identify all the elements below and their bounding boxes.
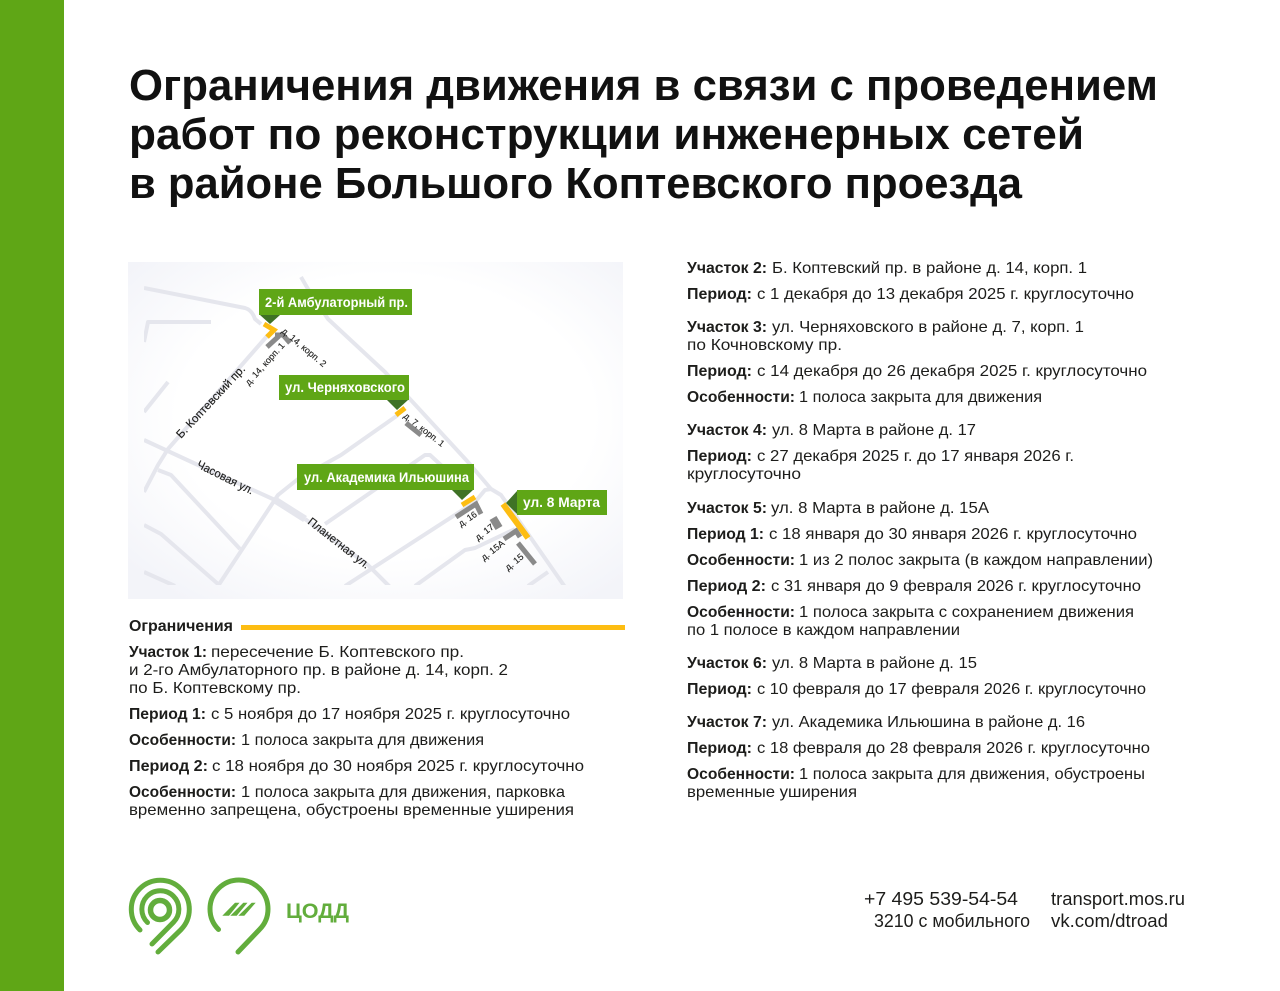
contacts: web: vk.com/dtroad <box>1051 911 1168 931</box>
text block: section 1: временно запрещена, обустроены временные уширения <box>129 802 574 819</box>
text block: section 3 <box>687 319 1147 406</box>
text block: section 7: ул. Академика Ильюшина в районе д. 16 <box>772 714 1085 731</box>
icon: transport logo pin <box>131 880 189 952</box>
map labels: Планетная ул. <box>305 516 372 572</box>
callout: 2-й Амбулаторный пр.: 2-й Амбулаторный пр. <box>265 294 408 310</box>
green sidebar <box>0 0 64 991</box>
text block: section 5: Период 2: <box>687 578 766 595</box>
text block: section 5: Участок 5: <box>687 500 767 517</box>
callout: ул. 8 Марта: ул. 8 Марта <box>523 494 600 510</box>
map labels: д. 7, корп. 1 <box>402 411 447 449</box>
text block: section 1: 1 полоса закрыта для движения, парковка <box>241 784 565 801</box>
text block: section 2 <box>687 260 1134 303</box>
text block: section 1: пересечение Б. Коптевского пр. <box>211 644 464 661</box>
text block: section 1: Участок 1: <box>129 644 207 661</box>
text block: section 3: с 14 декабря до 26 декабря 2025 г. круглосуточно <box>757 363 1147 380</box>
icon: CODD logo pin <box>210 880 268 952</box>
text block: section 3: Особенности: <box>687 389 795 406</box>
text block: section 5: по 1 полосе в каждом направлении <box>687 622 960 639</box>
text block: section 5: Особенности: <box>687 604 795 621</box>
text block: section 6: с 10 февраля до 17 февраля 2026 г. круглосуточно <box>757 681 1146 698</box>
contacts: web <box>1051 889 1185 931</box>
map labels: д. 16 <box>457 509 479 529</box>
text block: section 5: с 31 января до 9 февраля 2026 г. круглосуточно <box>771 578 1141 595</box>
text block: section 1: с 18 ноября до 30 ноября 2025 г. круглосуточно <box>212 758 584 775</box>
text block: section 7: временные уширения <box>687 784 857 801</box>
text block: section 5: Особенности: <box>687 552 795 569</box>
text block: section 2: Период: <box>687 286 752 303</box>
text block: section 4: ул. 8 Марта в районе д. 17 <box>772 422 976 439</box>
text block: section 1: Особенности: <box>129 732 236 749</box>
text block: section 1: по Б. Коптевскому пр. <box>129 680 301 697</box>
text block: section 1: Период 2: <box>129 758 208 775</box>
map labels <box>174 326 526 573</box>
text block: section 5: Период 1: <box>687 526 764 543</box>
map labels: д. 14, корп. 2 <box>280 326 328 369</box>
restrictions heading <box>129 618 625 635</box>
text block: section 3: 1 полоса закрыта для движения <box>799 389 1042 406</box>
text block: section 6: Участок 6: <box>687 655 767 672</box>
map panel <box>128 262 623 599</box>
text block: section 5: ул. 8 Марта в районе д. 15А <box>771 500 989 517</box>
title: работ по реконструкции инженерных сетей <box>129 110 1084 159</box>
text block: section 7: Участок 7: <box>687 714 767 731</box>
text block: section 1: Период 1: <box>129 706 206 723</box>
map labels: д. 15А <box>479 538 507 563</box>
title: Ограничения движения в связи с проведением <box>129 61 1158 110</box>
map labels: д. 15 <box>503 552 526 573</box>
map labels: д. 14, корп. 1 <box>243 341 287 387</box>
text block: section 2: Участок 2: <box>687 260 767 277</box>
text block: section 6: Период: <box>687 681 752 698</box>
text block: section 3: Период: <box>687 363 752 380</box>
text block: section 4: Участок 4: <box>687 422 767 439</box>
text block: section 7 <box>687 714 1150 801</box>
map labels: д. 17 <box>473 522 496 543</box>
contacts: phones: 3210 с мобильного <box>874 911 1030 931</box>
callout: ул. 8 Марта <box>506 490 607 515</box>
text block: section 4: Период: <box>687 448 752 465</box>
callout: ул. Черняховского <box>279 375 409 410</box>
callout: ул. Академика Ильюшина <box>297 464 474 500</box>
text block: section 7: Период: <box>687 740 752 757</box>
text block: section 1: 1 полоса закрыта для движения <box>241 732 484 749</box>
title: в районе Большого Коптевского проезда <box>129 159 1023 208</box>
callout: ул. Черняховского: ул. Черняховского <box>285 379 405 395</box>
text block: section 5: 1 из 2 полос закрыта (в каждом направлении) <box>799 552 1153 569</box>
logo text: ЦОДД <box>286 900 349 923</box>
text block: section 7: Особенности: <box>687 766 795 783</box>
text block: section 6 <box>687 655 1146 698</box>
buildings <box>267 335 535 564</box>
text block: section 3: по Кочновскому пр. <box>687 337 842 354</box>
text block: section 1: с 5 ноября до 17 ноября 2025 г. круглосуточно <box>211 706 570 723</box>
text block: section 6: ул. 8 Марта в районе д. 15 <box>772 655 977 672</box>
text block: section 4 <box>687 422 1074 483</box>
text block: section 4: с 27 декабря 2025 г. до 17 января 2026 г. <box>757 448 1074 465</box>
text block: section 4: круглосуточно <box>687 466 801 483</box>
text block: section 7: 1 полоса закрыта для движения, обустроены <box>799 766 1145 783</box>
text block: section 1 <box>129 644 584 819</box>
callout: ул. Академика Ильюшина: ул. Академика Ильюшина <box>304 469 469 485</box>
restrictions heading: Ограничения <box>129 618 233 635</box>
text block: section 5 <box>687 500 1153 639</box>
contacts: web: transport.mos.ru <box>1051 889 1185 909</box>
text block: section 3: ул. Черняховского в районе д. 7, корп. 1 <box>772 319 1084 336</box>
contacts: phones: +7 495 539-54-54 <box>864 889 1018 909</box>
text block: section 3: Участок 3: <box>687 319 767 336</box>
text block: section 5: с 18 января до 30 января 2026 г. круглосуточно <box>769 526 1137 543</box>
title <box>129 61 1158 208</box>
callout: 2-й Амбулаторный пр. <box>259 289 412 324</box>
text block: section 1: Особенности: <box>129 784 236 801</box>
map labels: Б. Коптевский пр. <box>174 363 248 441</box>
text block: section 5: 1 полоса закрыта с сохранением движения <box>799 604 1134 621</box>
text block: section 2: с 1 декабря до 13 декабря 2025 г. круглосуточно <box>757 286 1134 303</box>
restricted road segments <box>264 324 528 538</box>
contacts: phones <box>864 889 1030 931</box>
map labels: Часовая ул. <box>195 459 256 497</box>
text block: section 7: с 18 февраля до 28 февраля 2026 г. круглосуточно <box>757 740 1150 757</box>
text block: section 1: и 2-го Амбулаторного пр. в районе д. 14, корп. 2 <box>129 662 508 679</box>
text block: section 2: Б. Коптевский пр. в районе д. 14, корп. 1 <box>772 260 1087 277</box>
